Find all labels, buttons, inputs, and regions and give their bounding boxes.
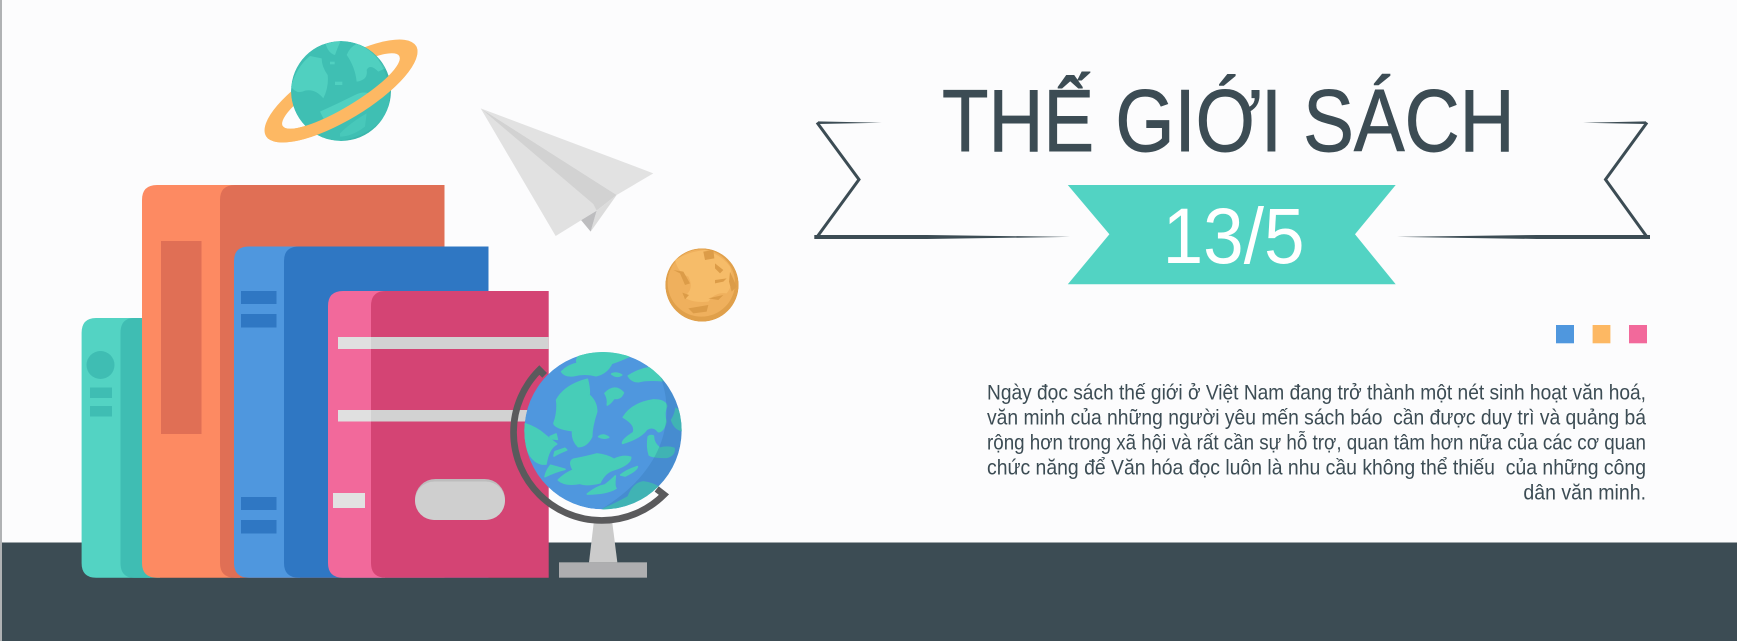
planet body: [291, 41, 395, 142]
book: blue: [234, 246, 488, 578]
ribbon outline: left: [814, 121, 1070, 239]
date text: 13/5: [1163, 191, 1305, 280]
book: teal: [82, 318, 160, 578]
paper plane: [481, 108, 653, 236]
globe arm: [514, 370, 664, 520]
description text: chức năng để Văn hóa đọc luôn là nhu cầu không thể thiếu của những công: [987, 455, 1646, 479]
globe stand: [559, 518, 647, 578]
description text: Ngày đọc sách thế giới ở Việt Nam đang trở thành một nét sinh hoạt văn hoá,: [987, 380, 1646, 404]
planet with ring: [264, 40, 418, 142]
ring front: [266, 46, 431, 161]
ring back: [251, 21, 431, 161]
ribbon: date: [1068, 185, 1396, 284]
description text: rộng hơn trong xã hội và rất cần sự hỗ trợ, quan tâm hơn nữa của các cơ quan: [987, 429, 1646, 454]
description text: dân văn minh.: [1523, 480, 1646, 504]
description text: [987, 380, 1646, 504]
description text: văn minh của những người yêu mến sách báo cần được duy trì và quảng bá: [987, 405, 1646, 429]
book: orange: [142, 185, 444, 578]
globe with stand: [514, 352, 690, 578]
book: pink: [328, 291, 549, 578]
small orange planet: [665, 248, 739, 322]
colour squares: [1556, 325, 1647, 343]
ribbon outline: right: [1396, 121, 1650, 239]
globe sphere: [523, 352, 690, 510]
table surface: [2, 542, 1737, 641]
title: THẾ GIỚI SÁCH: [942, 71, 1515, 170]
